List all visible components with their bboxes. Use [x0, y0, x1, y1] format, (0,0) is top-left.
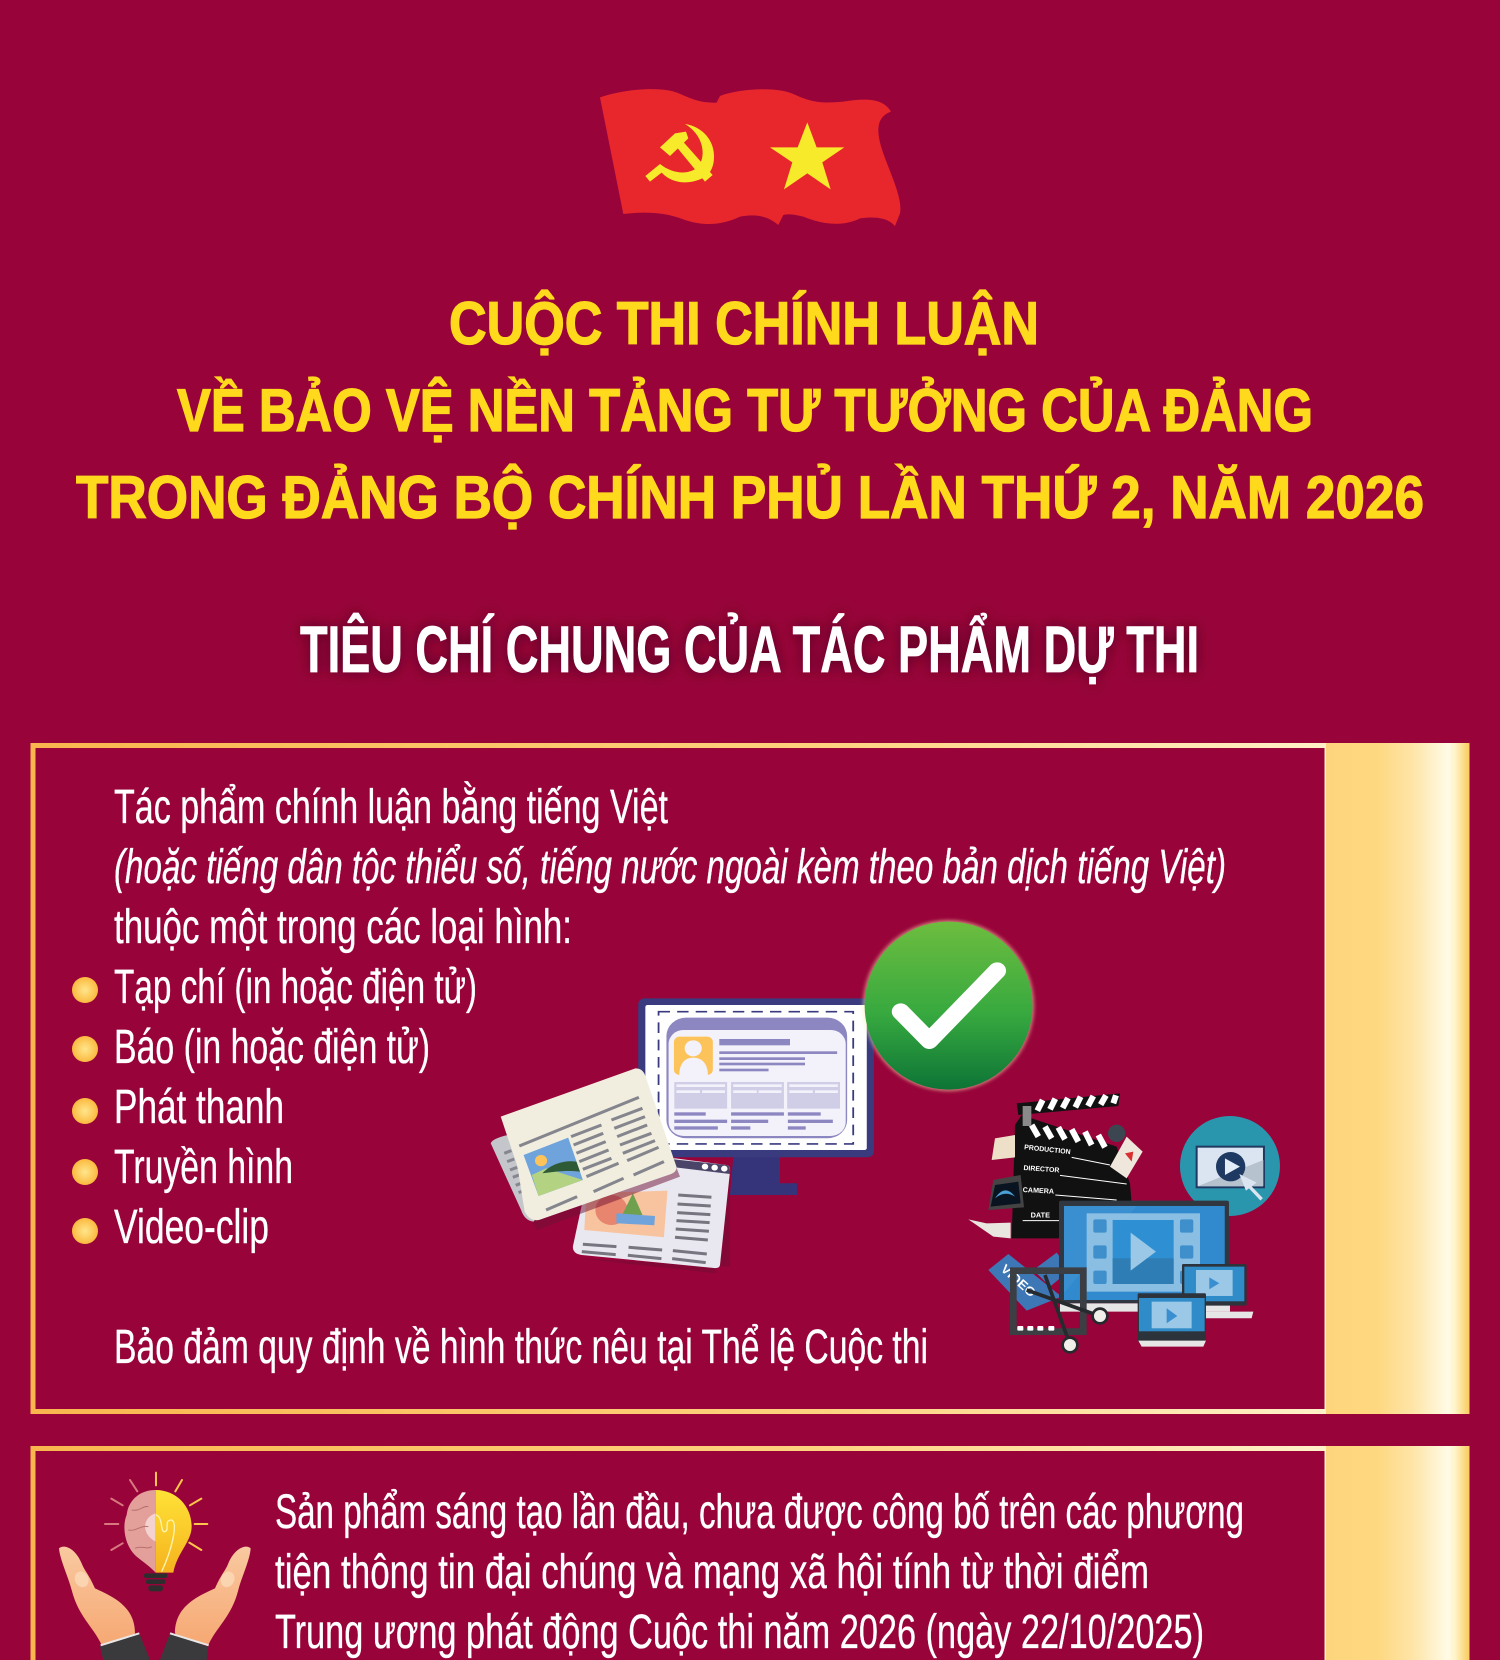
title: VỀ BẢO VỆ NỀN TẢNG TƯ TƯỞNG CỦA ĐẢNG [177, 377, 1313, 444]
icon: video production: DIRECTOR [1023, 1165, 1060, 1174]
list of publication types: Video-clip [114, 1201, 269, 1254]
panel: criterion two [33, 1446, 1470, 1660]
panel: criterion one [33, 743, 1470, 1414]
closing text: tiện thông tin đại chúng và mạng xã hội tính từ thời điểm [275, 1546, 1149, 1599]
icon: computer and newspapers [491, 920, 1034, 1273]
list of publication types: Phát thanh [114, 1081, 284, 1134]
intro text [114, 780, 1226, 954]
icon: party and national flag [600, 89, 900, 226]
closing text [275, 1486, 1244, 1659]
intro text: thuộc một trong các loại hình: [114, 901, 572, 954]
intro text: Tác phẩm chính luận bằng tiếng Việt [114, 780, 668, 834]
list of publication types: Tạp chí (in hoặc điện tử) [114, 961, 477, 1014]
icon: video production: DATE [1031, 1213, 1050, 1220]
format note: Bảo đảm quy định về hình thức nêu tại Thể lệ Cuộc thi [114, 1321, 928, 1374]
icon: video production: VIDEO [998, 1262, 1038, 1300]
icon: video production [968, 1093, 1280, 1352]
icon: lightbulb and hands [59, 1473, 251, 1660]
title: CUỘC THI CHÍNH LUẬN [449, 290, 1039, 357]
list of publication types: Báo (in hoặc điện tử) [114, 1021, 430, 1074]
title [76, 290, 1424, 531]
icon: green check mark [863, 920, 1034, 1091]
list of publication types: Truyền hình [114, 1141, 293, 1194]
icon: video production: CAMERA [1023, 1187, 1054, 1196]
icon: video production: PRODUCTION [1024, 1144, 1071, 1156]
list of publication types [72, 961, 477, 1254]
